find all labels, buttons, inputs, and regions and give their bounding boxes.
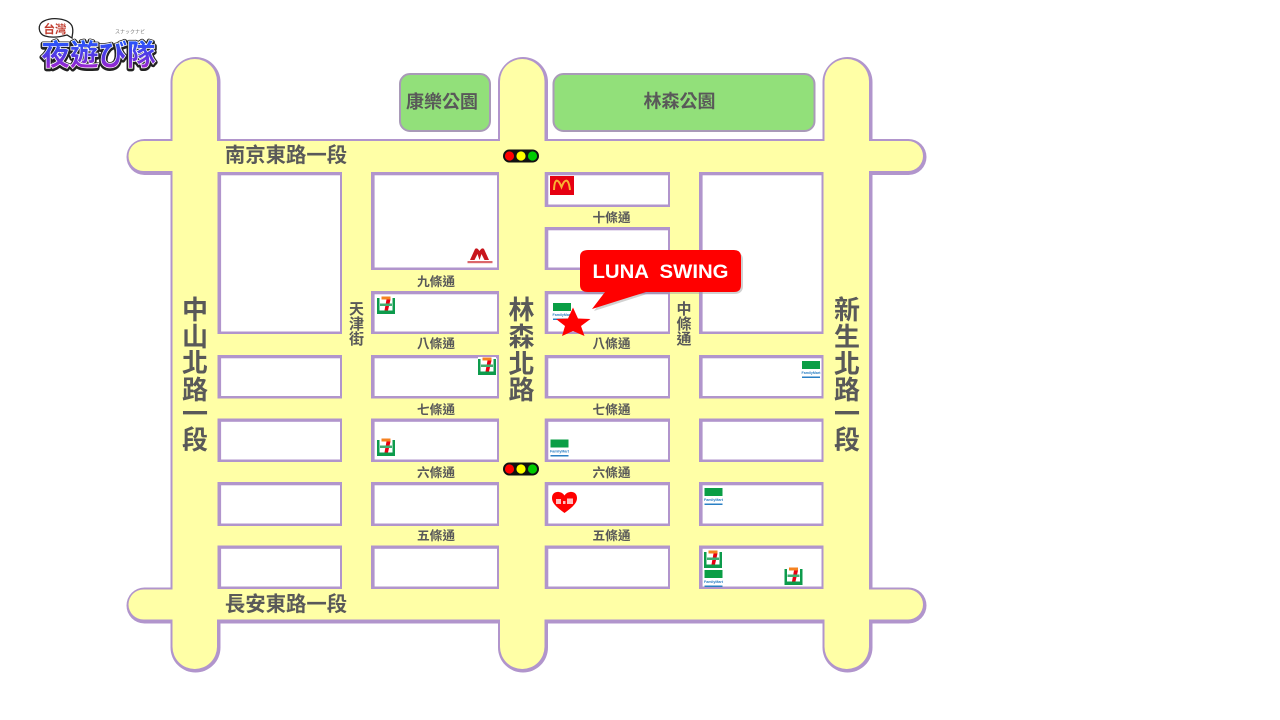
logo: 台灣夜遊び隊: スナックナビ (115, 28, 145, 36)
panel: 林森公園 park (554, 74, 814, 131)
logo: 台灣夜遊び隊: 夜遊び隊 (42, 40, 156, 73)
logo: 台灣夜遊び隊: 台灣 (44, 22, 67, 36)
heading: 林森北路: 林 (508, 295, 535, 325)
heading: 新生北路一段: 路 (834, 375, 860, 405)
icon: FamilyMart 六條通 (550, 440, 570, 456)
icon: location star (556, 308, 590, 336)
heading: 林森北路: 北 (508, 349, 535, 379)
icon: FamilyMart corner (704, 570, 724, 587)
heading: 新生北路一段: 段 (834, 425, 860, 455)
heading: 南京東路一段: 南京東路一段 (225, 143, 347, 167)
icon: traffic light north (503, 150, 539, 162)
icon: FamilyMart east 五條通 (704, 488, 724, 505)
icon: traffic light south (503, 462, 539, 476)
road network (126, 57, 926, 672)
label: 天津街: 津 (349, 316, 364, 333)
labels: street names west: 五條通 (417, 528, 455, 543)
callout: LUNA SWING (580, 250, 743, 311)
label: 中條通: 條 (676, 316, 692, 333)
label: 中條通: 通 (676, 331, 692, 348)
heading: 林森北路: 路 (508, 375, 535, 405)
panel: 林森公園 park: 林森公園 (644, 92, 716, 112)
labels: street names east (592, 210, 631, 543)
heading: 新生北路一段: 生 (834, 322, 860, 352)
callout: LUNA SWING: LUNA SWING (592, 261, 728, 283)
heading: 中山北路一段: 路 (182, 375, 208, 405)
labels: street names east: 五條通 (592, 528, 631, 543)
icon: heart shop (552, 492, 577, 513)
logo: 台灣夜遊び隊 (39, 19, 156, 73)
labels: street names east: 十條通 (592, 210, 631, 225)
icon: FamilyMart at LUNA SWING (553, 303, 572, 320)
labels: street names west: 七條通 (417, 402, 455, 417)
label: 中條通: 中 (676, 301, 692, 318)
icon: 7-Eleven corner east (784, 567, 802, 585)
icon: FamilyMart east 八條通 (802, 361, 821, 378)
heading: 新生北路一段: 新 (834, 295, 860, 325)
icon: 7-Eleven 九條通 (377, 296, 395, 314)
heading: 中山北路一段: 段 (182, 425, 208, 455)
labels: street names west: 九條通 (417, 274, 455, 289)
icon: 7-Eleven 七條通 (377, 438, 395, 456)
labels: street names west (417, 274, 455, 543)
icon: MOS Burger (468, 248, 492, 263)
icon: McDonald's (550, 176, 574, 195)
label: 天津街: 天 (349, 301, 364, 318)
heading: 林森北路: 森 (508, 322, 535, 352)
labels: street names east: 八條通 (592, 336, 631, 351)
labels: street names east: 六條通 (592, 465, 631, 480)
labels: street names west: 八條通 (417, 336, 455, 351)
logo: 台灣夜遊び隊: 夜遊び隊 (42, 39, 156, 72)
label: 天津街: 街 (349, 331, 364, 348)
panel: 康樂公園 park (400, 74, 490, 131)
heading: 中山北路一段: 一 (182, 399, 208, 429)
heading: 中山北路一段: 中 (182, 295, 208, 325)
heading: 中山北路一段: 北 (182, 348, 208, 378)
panel: 康樂公園 park: 康樂公園 (406, 91, 478, 112)
heading: 長安東路一段: 長安東路一段 (225, 592, 347, 616)
heading: 新生北路一段: 一 (834, 399, 860, 429)
panel: city blocks (218, 172, 824, 589)
heading: 新生北路一段: 北 (834, 349, 860, 379)
labels: street names east: 七條通 (592, 402, 631, 417)
labels: street names west: 六條通 (417, 465, 455, 480)
icon: 7-Eleven corner west (704, 550, 722, 568)
heading: 中山北路一段: 山 (182, 322, 208, 352)
icon: 7-Eleven 八條通 (478, 357, 496, 375)
